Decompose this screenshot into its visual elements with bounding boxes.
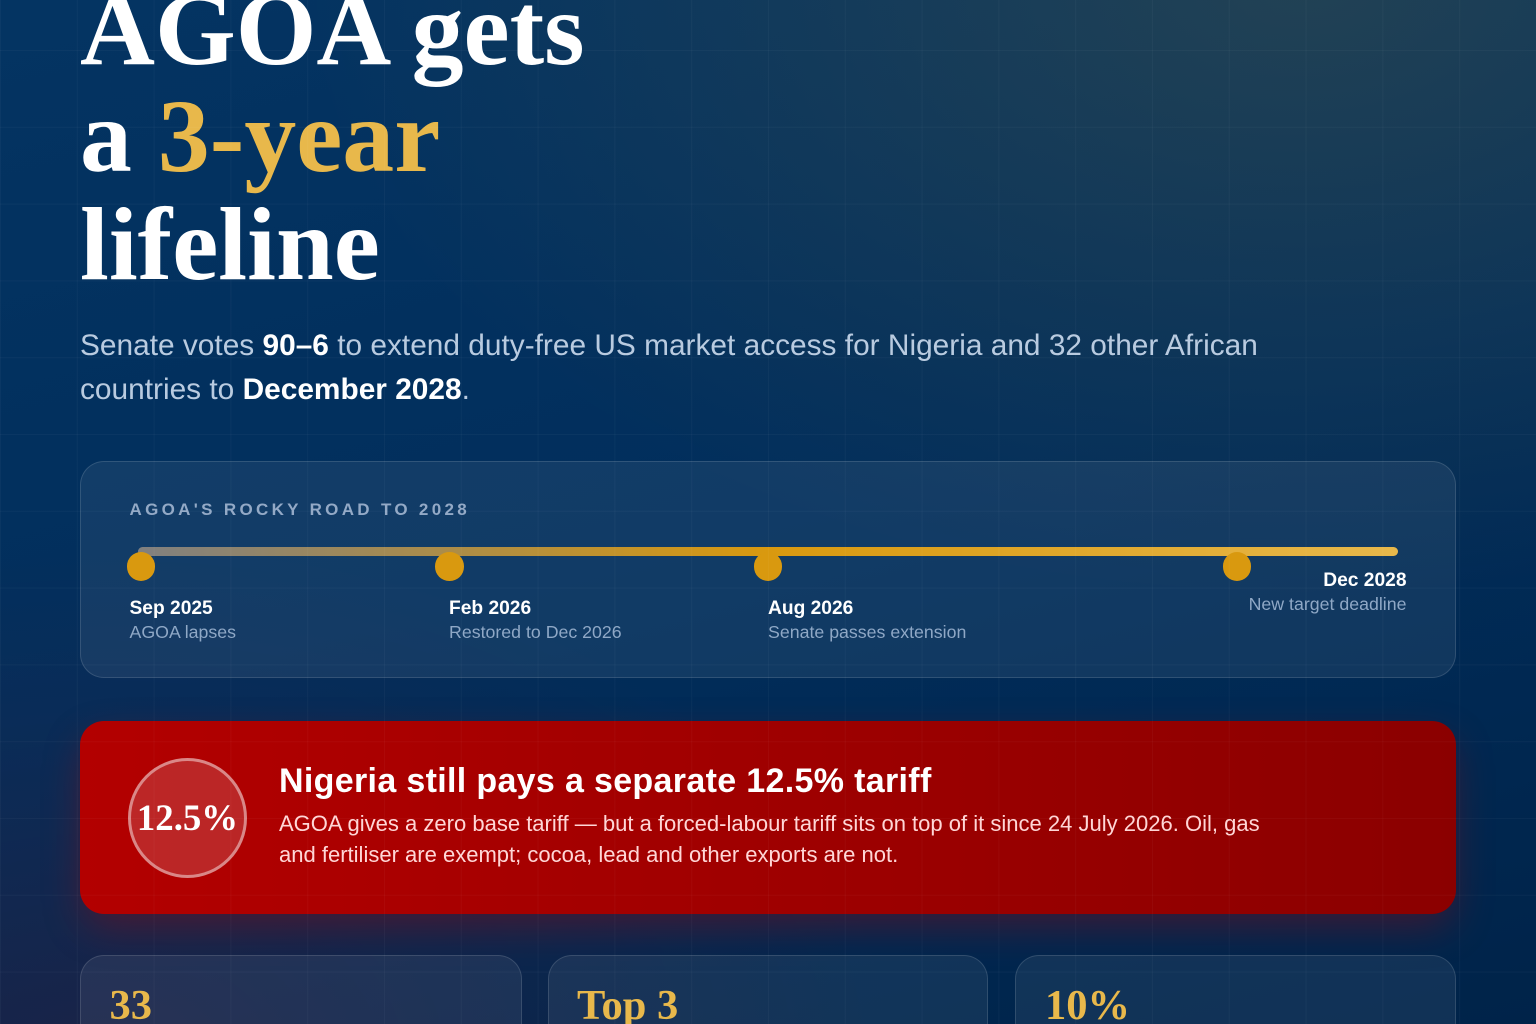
title: lifeline <box>80 188 380 302</box>
panel: stat card 10% <box>1015 955 1456 1024</box>
timeline label: Feb 2026: Restored to Dec 2026 <box>449 622 622 642</box>
title <box>80 0 585 302</box>
timeline label: Feb 2026: Feb 2026 <box>449 598 531 619</box>
timeline label: Aug 2026 <box>768 598 966 642</box>
timeline marker: Dec 2028 <box>1222 552 1251 580</box>
panel: stat card 33 <box>80 955 522 1024</box>
timeline label: Feb 2026 <box>449 598 622 642</box>
timeline heading: AGOA'S ROCKY ROAD TO 2028 <box>130 500 470 519</box>
timeline label: Dec 2028 <box>1249 570 1406 614</box>
tariff badge: 12.5% <box>137 797 238 838</box>
timeline label: Aug 2026: Senate passes extension <box>768 622 966 642</box>
tariff description: AGOA gives a zero base tariff — but a forced-labour tariff sits on top of it since 24 July 2026. Oil, gas <box>279 811 1260 836</box>
timeline label: Dec 2028: Dec 2028 <box>1323 570 1406 591</box>
subtitle: countries to December 2028. <box>80 373 470 406</box>
tariff badge <box>128 758 247 878</box>
timeline marker: Aug 2026 <box>754 552 782 580</box>
panel: tariff callout <box>80 721 1456 914</box>
timeline label: Sep 2025: Sep 2025 <box>130 598 213 619</box>
timeline marker: Feb 2026 <box>435 552 464 580</box>
tariff description <box>279 811 1260 867</box>
panel: timeline <box>80 461 1456 678</box>
timeline label: Sep 2025: AGOA lapses <box>130 622 236 642</box>
panel: stat card Top 3 <box>548 955 988 1024</box>
timeline bar <box>138 547 1398 556</box>
timeline label: Dec 2028: New target deadline <box>1249 594 1406 614</box>
tariff heading: Nigeria still pays a separate 12.5% tariff <box>279 762 932 800</box>
subtitle <box>80 329 1258 406</box>
timeline label: Sep 2025 <box>130 598 236 642</box>
timeline label: Aug 2026: Aug 2026 <box>768 598 853 619</box>
tariff description: and fertiliser are exempt; cocoa, lead and other exports are not. <box>279 842 898 867</box>
timeline marker: Sep 2025 <box>126 552 155 580</box>
subtitle: Senate votes 90–6 to extend duty-free US market access for Nigeria and 32 other African <box>80 329 1258 362</box>
title: a 3-year <box>80 80 440 194</box>
